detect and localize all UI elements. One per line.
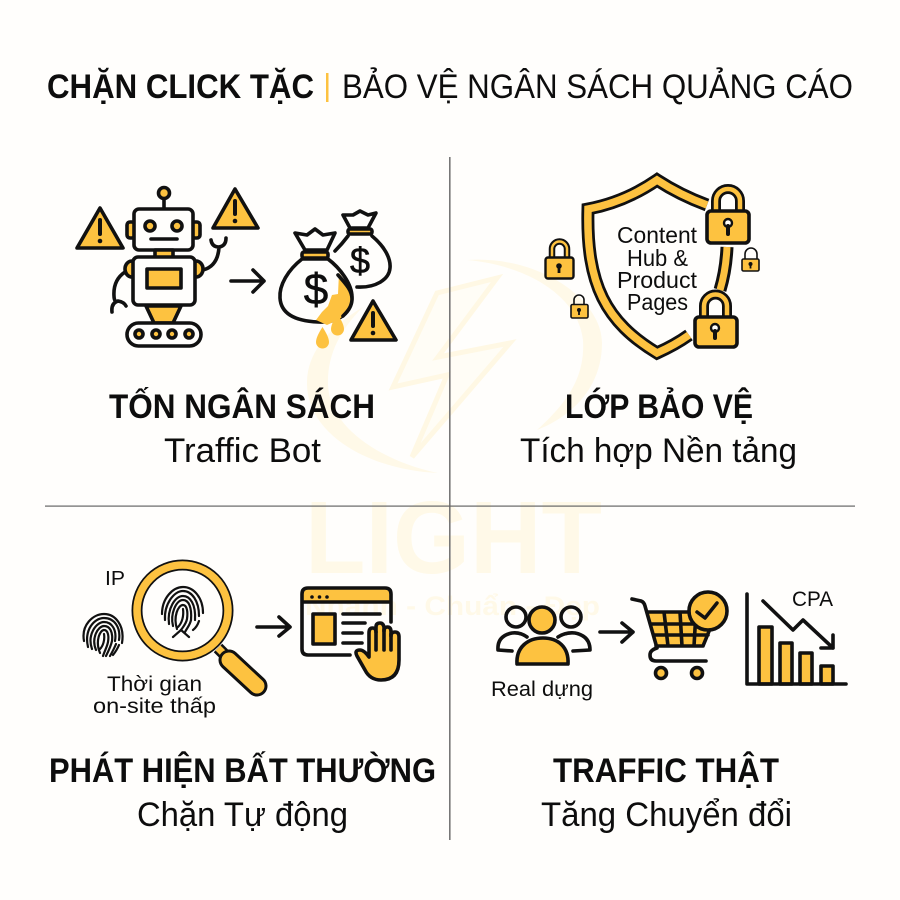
shield text: Pages [627,289,688,315]
heading: LỚP BẢO VỆ [565,388,753,426]
heading: TRAFFIC THẬT [553,752,779,790]
icon: magnifier [137,565,257,686]
shield text: Hub & [627,245,688,271]
chart: CPA falling: CPA [792,588,833,611]
watermark: light logo: LIGHT [305,480,602,595]
subheading: Tích hợp Nền tảng [520,432,797,470]
icon: users [498,607,590,664]
watermark: light logo: Nhanh - Chuẩn - Đẹp [305,591,600,621]
watermark: light logo [305,260,602,621]
heading: TỐN NGÂN SÁCH [109,387,375,426]
title: CHẶN CLICK TẶC [47,68,314,106]
icon: lock small right [742,248,759,271]
heading: PHÁT HIỆN BẤT THƯỜNG [49,752,436,790]
arrow [600,623,633,642]
arrow [231,270,264,292]
subheading: Chặn Tự động [137,796,348,834]
label: on-site time: on-site thấp [93,695,216,718]
panel: protection layer [520,180,797,470]
shield text: Content [617,222,698,248]
icon: lock small left [571,295,588,318]
label: IP: IP [105,568,125,590]
subheading: Traffic Bot [164,432,322,470]
icon: warning left [77,208,123,248]
icon: lock left [546,242,574,278]
label: on-site time: Thời gian [107,673,202,696]
icon: lock top right [707,189,749,243]
shield text [617,222,698,315]
title [47,68,853,106]
chart: CPA falling [747,588,846,684]
shield text: Product [617,267,698,293]
icon: warning right [213,189,258,228]
icon: browser with hand [302,588,399,680]
title: BẢO VỆ NGÂN SÁCH QUẢNG CÁO [342,68,853,106]
icon: cart with check [632,592,727,678]
icon: robot [112,188,226,346]
icon: lock bottom right [695,294,737,347]
label: on-site time [93,673,216,718]
icon: shield [588,180,727,353]
icon: money bags [280,211,390,348]
panel: anomaly detection [49,565,436,834]
subheading: Tăng Chuyển đổi [541,796,792,834]
label: real users: Real dựng [491,678,593,701]
icon: money bags: $ [304,265,328,314]
icon: warning lower [351,301,396,340]
arrow [257,617,290,636]
panel: wasted budget [77,188,396,470]
icon: money bags: $ [350,240,370,281]
icon: fingerprint left [84,614,123,656]
panel: real traffic [491,588,846,834]
